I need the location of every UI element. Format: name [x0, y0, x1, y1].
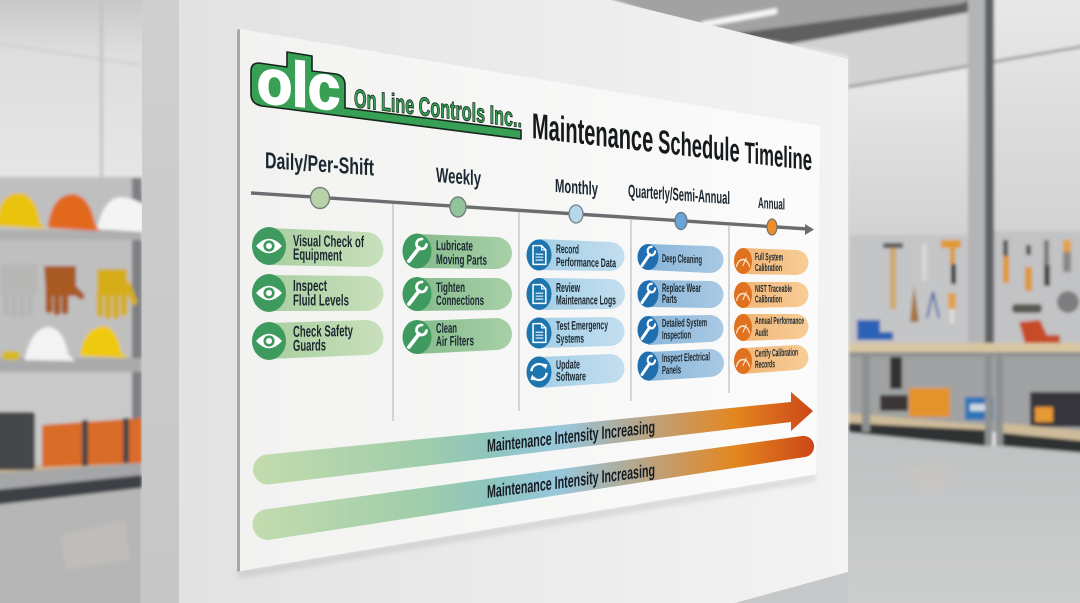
task: performance audit: Audit	[755, 327, 768, 339]
task: safety guards: Guards	[293, 337, 326, 355]
task: visual check: Equipment	[293, 247, 342, 265]
task: update software: Software	[556, 369, 586, 384]
task: clean filters	[402, 318, 512, 354]
task: safety guards	[252, 320, 384, 360]
background: right warehouse wall with tools and benches	[600, 0, 1080, 603]
marker: monthly	[569, 205, 583, 223]
task: system inspection: Detailed System	[662, 317, 707, 330]
task: full calibration	[734, 248, 808, 275]
task: certify records: Certify Calibration	[755, 347, 798, 360]
task: electrical panels: Inspect Electrical	[662, 351, 710, 365]
task: test emergency	[526, 317, 624, 348]
logo wordmark: On Line Controls Inc..	[354, 83, 522, 133]
task: safety guards: Check Safety	[293, 323, 353, 341]
task: tighten	[402, 277, 512, 311]
task: lubricate: Lubricate	[436, 237, 473, 254]
task: electrical panels: Panels	[662, 364, 681, 377]
task: update software	[526, 354, 624, 388]
task: review logs	[526, 278, 625, 310]
panel: timeline board	[237, 29, 820, 572]
task: inspect fluid: Inspect	[293, 278, 327, 295]
task: NIST calibration	[734, 282, 808, 308]
column: monthly tasks	[526, 239, 625, 388]
marker: annual	[767, 219, 777, 235]
task: review logs: Review	[556, 281, 580, 295]
task: review logs: Maintenance Logs	[556, 294, 616, 308]
column: weekly tasks	[402, 234, 512, 354]
task: clean filters: Clean	[436, 320, 457, 336]
task: update software: Update	[556, 357, 580, 372]
task: visual check	[252, 227, 384, 267]
column: quarterly tasks	[638, 244, 724, 381]
task: system inspection	[638, 315, 724, 345]
heading: daily: Daily/Per-Shift	[265, 147, 374, 180]
task: system inspection: Inspection	[662, 329, 691, 342]
task: certify records: Records	[755, 358, 775, 371]
column: annual tasks	[734, 248, 808, 374]
task: NIST calibration: NIST Traceable	[755, 283, 792, 295]
background: white display wall	[142, 0, 848, 603]
task: record data: Record	[556, 242, 579, 257]
task: visual check: Visual Check of	[293, 233, 364, 251]
task: electrical panels	[638, 349, 724, 381]
task: full calibration: Calibration	[755, 262, 782, 274]
task: record data	[526, 239, 624, 271]
heading: weekly: Weekly	[436, 164, 481, 191]
task: tighten: Connections	[436, 292, 484, 308]
task: full calibration: Full System	[755, 251, 783, 264]
task: test emergency: Systems	[556, 332, 584, 346]
arrow: maintenance intensity: Maintenance Intensity Increasing	[487, 417, 655, 456]
arrow: maintenance intensity	[253, 392, 813, 484]
task: certify records	[734, 345, 808, 374]
task: lubricate	[402, 234, 512, 269]
marker: weekly	[450, 197, 466, 217]
task: deep cleaning: Deep Cleaning	[662, 253, 702, 266]
task: NIST calibration: Calibration	[755, 294, 782, 306]
task: performance audit	[734, 314, 808, 341]
task: inspect fluid	[252, 274, 384, 312]
task: lubricate: Moving Parts	[436, 251, 487, 268]
marker: daily	[310, 188, 330, 208]
task: record data: Performance Data	[556, 255, 617, 270]
task: clean filters: Air Filters	[436, 332, 474, 349]
background: left warehouse wall	[0, 0, 145, 603]
timeline axis	[251, 188, 814, 421]
task: test emergency: Test Emergency	[556, 318, 608, 333]
task: performance audit: Annual Performance	[755, 315, 804, 327]
task: tighten: Tighten	[436, 279, 465, 295]
column: daily tasks	[252, 227, 384, 360]
logo: OLC: olc	[257, 47, 340, 124]
task: replace wear parts: Replace Wear	[662, 283, 701, 295]
title: Maintenance Schedule Timeline	[532, 105, 812, 178]
heading: annual: Annual	[758, 195, 785, 214]
task: replace wear parts: Parts	[662, 294, 677, 306]
task: inspect fluid: Fluid Levels	[293, 292, 349, 310]
heading: monthly: Monthly	[555, 176, 598, 200]
task: replace wear parts	[638, 280, 724, 308]
marker: quarterly	[675, 212, 687, 230]
heading: quarterly: Quarterly/Semi-Annual	[628, 181, 730, 208]
bar: maintenance intensity	[252, 436, 814, 540]
bar: maintenance intensity: Maintenance Intensity Increasing	[487, 460, 655, 502]
logo: OLC	[251, 47, 522, 139]
